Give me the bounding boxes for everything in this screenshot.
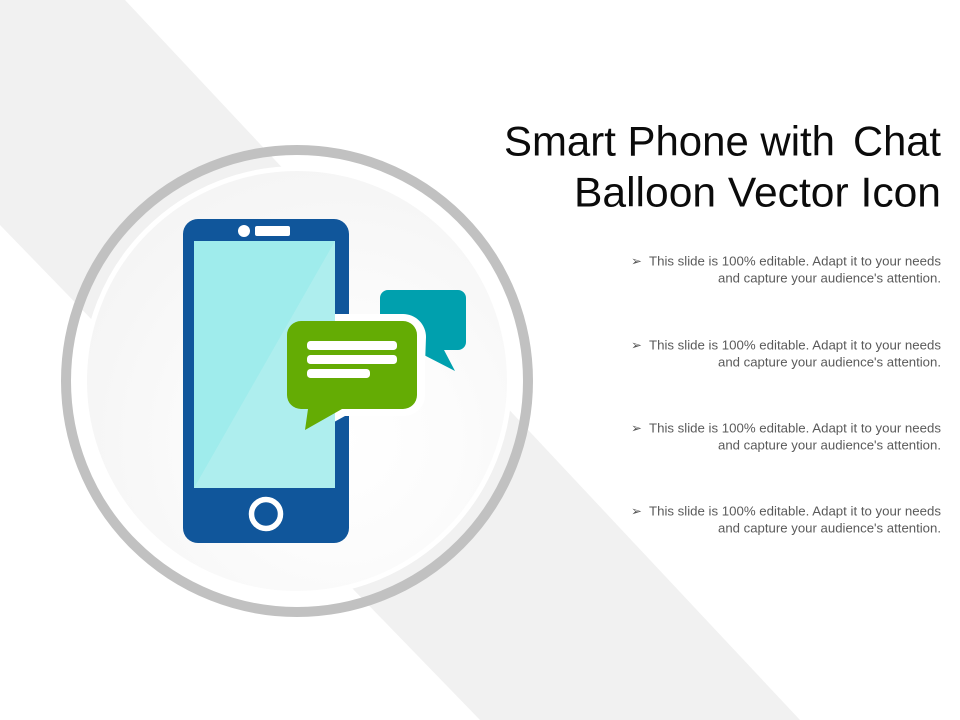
title: Chat [853, 118, 941, 164]
bullet text 3: ➢ [631, 422, 642, 436]
bullet text 1: This slide is 100% editable. Adapt it to your needs [649, 254, 941, 268]
bullet text 3: and capture your audience's attention. [718, 438, 941, 452]
message line 3 [307, 369, 370, 378]
title: Balloon Vector Icon [574, 168, 941, 216]
bullet text 3: This slide is 100% editable. Adapt it to your needs [649, 422, 941, 436]
inner gradient disc with white rim [84, 168, 510, 594]
message line 2 [307, 355, 397, 364]
icon: teal chat balloon [380, 290, 466, 371]
bullet text 4: This slide is 100% editable. Adapt it to your needs [649, 504, 941, 518]
icon: green chat balloon [287, 321, 417, 430]
circle emblem [66, 150, 528, 612]
bullet text 1 [631, 254, 941, 286]
screen glare [194, 241, 335, 488]
title [504, 118, 941, 216]
icon: smartphone [183, 219, 349, 543]
bullet text 4 [631, 504, 941, 536]
bullet text 4: and capture your audience's attention. [718, 522, 941, 536]
speaker [255, 226, 290, 236]
bullet text 3 [631, 422, 941, 452]
bullet text 2: This slide is 100% editable. Adapt it to your needs [649, 338, 941, 352]
message line 1 [307, 341, 397, 350]
home button [252, 500, 280, 528]
bullet text 2 [631, 338, 941, 370]
front camera [238, 225, 250, 237]
bullet text 1: and capture your audience's attention. [718, 272, 941, 286]
phone body [183, 219, 349, 543]
phone screen [194, 241, 335, 488]
bullet text 2: and capture your audience's attention. [718, 356, 941, 370]
title: Smart Phone with [504, 118, 835, 164]
bullet text 1: ➢ [631, 254, 642, 270]
balloon white outline [335, 314, 426, 422]
bullet text 4: ➢ [631, 504, 642, 520]
outer grey ring [66, 150, 528, 612]
balloon body [287, 321, 417, 430]
bullet text 2: ➢ [631, 338, 642, 354]
